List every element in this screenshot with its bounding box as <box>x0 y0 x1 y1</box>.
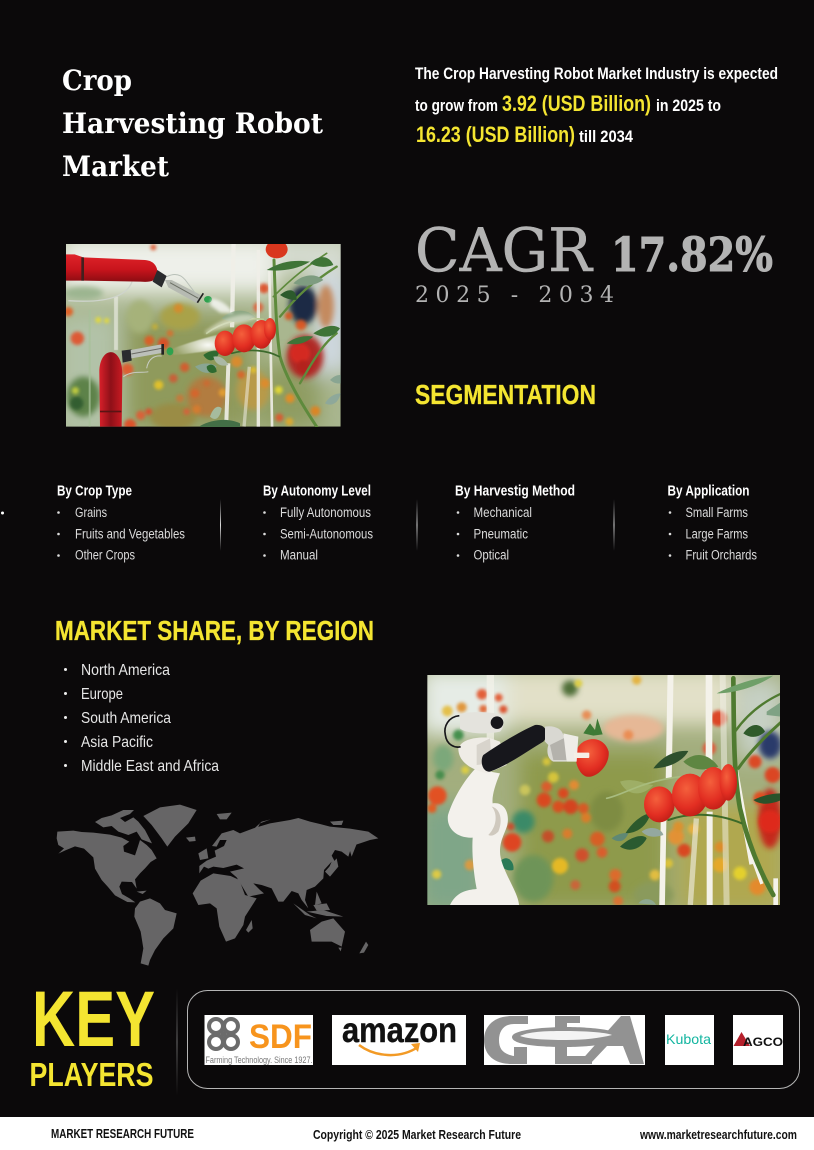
tomatoes on vine <box>644 786 675 822</box>
region list: South America <box>81 710 171 727</box>
segment column: by harvesting method: By Harvestig Method <box>455 484 575 500</box>
spray top <box>210 298 233 313</box>
segment column: by harvesting method <box>455 484 575 562</box>
segment column: by application <box>668 484 757 562</box>
heading: segmentation: SEGMENTATION <box>415 379 596 410</box>
footer bar: MARKET RESEARCH FUTURE <box>51 1126 194 1141</box>
segment column: by crop type <box>57 484 185 562</box>
world map <box>57 805 378 966</box>
CAGR figure: CAGR <box>415 216 594 286</box>
held tomato <box>576 739 609 777</box>
segment column: by application: Large Farms <box>686 526 748 542</box>
market size statement: till 2034 <box>579 128 634 146</box>
logo: Kubota: Kubota <box>666 1031 711 1047</box>
segment column: by application: Fruit Orchards <box>686 548 757 562</box>
market size statement <box>415 65 778 147</box>
segment column: by autonomy level: Manual <box>280 548 318 562</box>
title <box>62 64 323 183</box>
region list: Middle East and Africa <box>81 758 219 775</box>
logo: AGCO: AGCO <box>743 1035 783 1049</box>
lower arm <box>99 352 122 427</box>
robot arm <box>66 254 158 282</box>
logo: AGCO <box>733 1015 783 1065</box>
market size statement: in 2025 to <box>656 97 721 115</box>
region list: Europe <box>81 686 123 703</box>
stray bullet <box>1 512 4 514</box>
key players panel <box>188 990 800 1088</box>
footer bar <box>0 1117 814 1150</box>
stakes <box>89 244 273 427</box>
segment column: by autonomy level <box>263 484 373 562</box>
segment column: by autonomy level: Fully Autonomous <box>280 505 371 520</box>
market size statement: 3.92 (USD Billion) <box>502 91 651 116</box>
market size statement: to grow from <box>415 97 498 115</box>
heading: market share by region: MARKET SHARE, BY REGION <box>55 615 374 646</box>
CAGR figure: 2025 - 2034 <box>415 283 614 308</box>
segment column: by crop type: Fruits and Vegetables <box>75 526 185 542</box>
title: Market <box>62 150 169 183</box>
logo: Kubota <box>665 1015 714 1065</box>
logo: SDF <box>204 1015 313 1065</box>
footer bar: Copyright © 2025 Market Research Future <box>313 1127 521 1142</box>
logo: GEA <box>484 1015 645 1065</box>
tomatoes <box>215 331 235 356</box>
CAGR figure: 17.82% <box>611 228 773 283</box>
region list: Asia Pacific <box>81 734 153 751</box>
region list <box>64 662 219 775</box>
key players heading: KEY <box>32 974 155 1063</box>
tomato plant stems and leaves <box>207 253 337 427</box>
segment column: by harvesting method: Optical <box>474 548 509 562</box>
key players heading <box>30 974 155 1093</box>
stakes <box>487 675 778 905</box>
segment column: by harvesting method: Pneumatic <box>474 526 528 542</box>
CAGR figure <box>415 216 773 308</box>
segment column: by harvesting method: Mechanical <box>474 505 532 520</box>
segment column: by crop type: Grains <box>75 505 107 520</box>
key players heading: PLAYERS <box>30 1056 154 1093</box>
market size statement: 16.23 (USD Billion) <box>416 122 575 147</box>
image: white robot arm holding tomato <box>420 668 783 912</box>
logo: SDF: SDF <box>249 1018 312 1056</box>
segment column: by autonomy level: Semi-Autonomous <box>280 526 373 542</box>
title: Harvesting Robot <box>62 107 323 140</box>
segment column: by crop type: Other Crops <box>75 548 135 562</box>
image: red robot arms spraying tomatoes <box>66 244 341 427</box>
title: Crop <box>62 64 132 97</box>
logo: amazon: amazon <box>342 1011 457 1050</box>
segment column: by application: By Application <box>668 484 750 500</box>
region list: North America <box>81 662 170 679</box>
plant stems and leaves <box>607 678 782 895</box>
segment column: by autonomy level: By Autonomy Level <box>263 484 371 500</box>
logo: amazon <box>332 1011 466 1065</box>
segment column: by application: Small Farms <box>686 505 748 520</box>
spray <box>173 335 217 355</box>
logo: SDF: Farming Technology. Since 1927. <box>206 1055 312 1065</box>
robot white arm <box>448 769 519 905</box>
segment column: by crop type: By Crop Type <box>57 484 132 500</box>
